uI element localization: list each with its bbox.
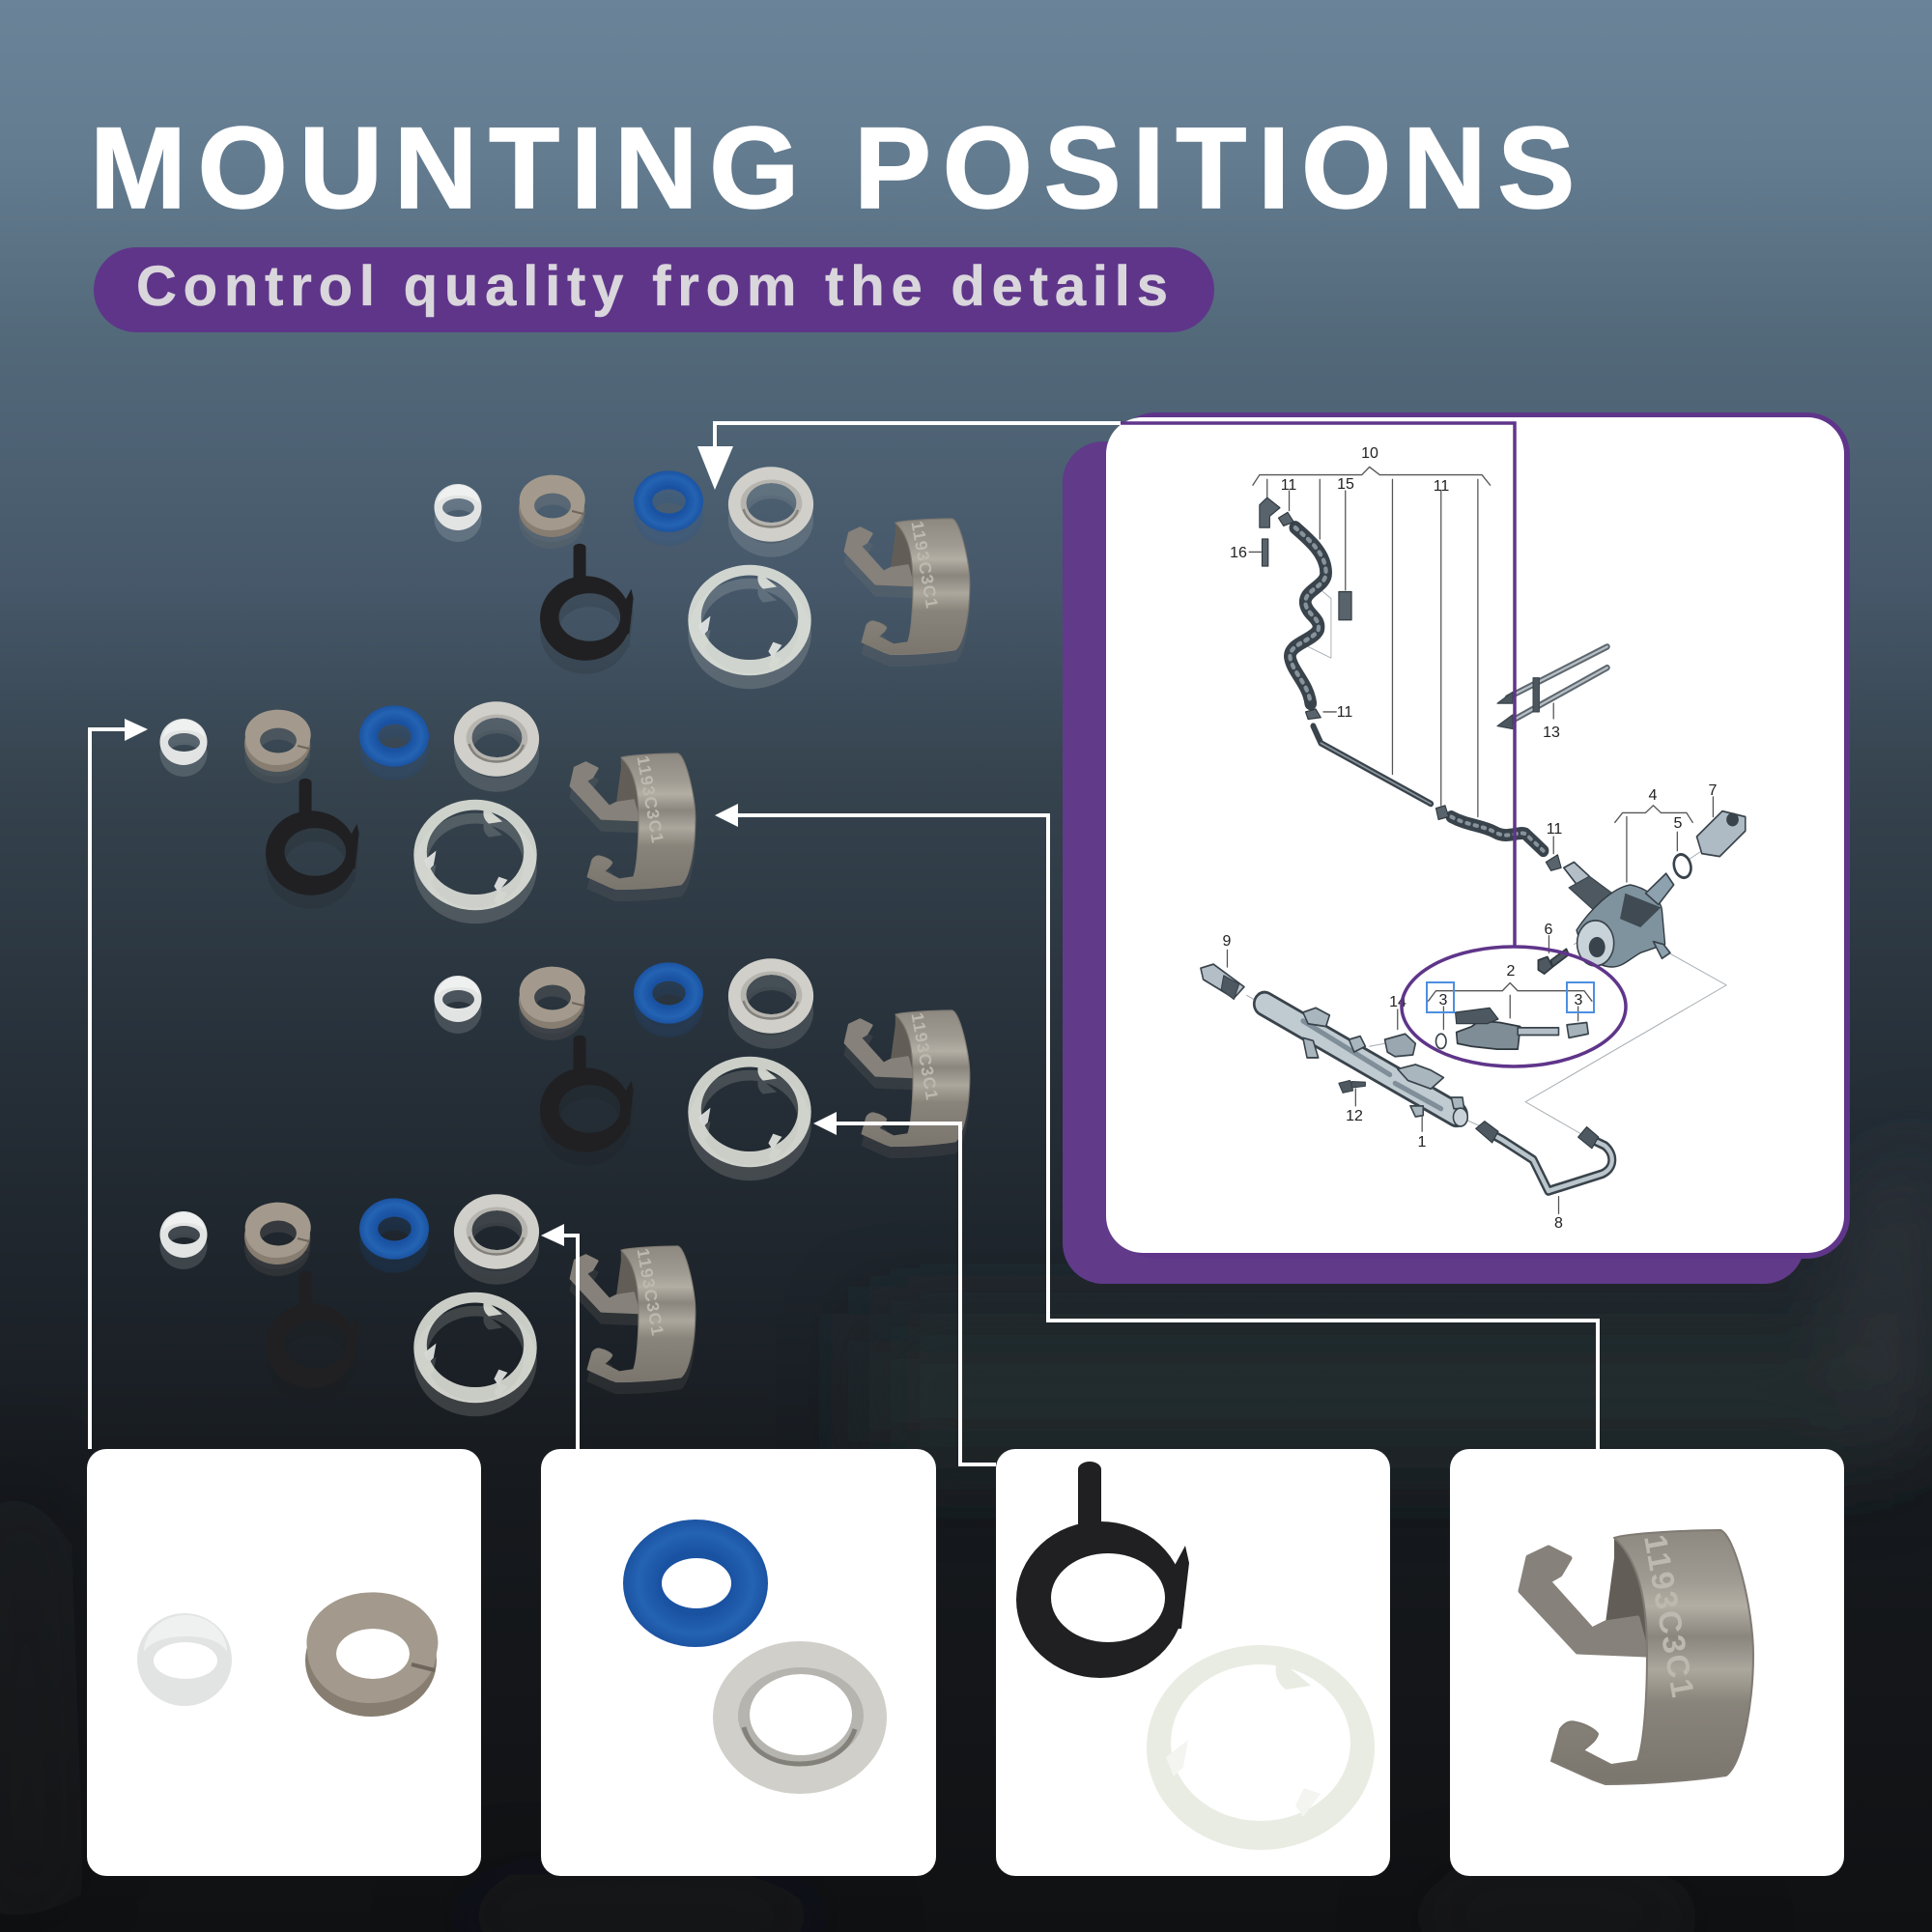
icon: metal washer bbox=[713, 1641, 887, 1794]
highlight: purple ellipse around injector bbox=[1402, 947, 1626, 1066]
part: white bush bbox=[160, 719, 207, 765]
purple connector line bbox=[1121, 423, 1515, 947]
part: white bush bbox=[160, 1211, 207, 1258]
part: tan spacer bbox=[244, 710, 311, 772]
part: black retainer bbox=[540, 1036, 634, 1152]
arrow: panel 2 to set 4 bbox=[541, 1224, 578, 1449]
part number labels: 10 bbox=[1361, 445, 1378, 462]
part: black retainer bbox=[540, 544, 634, 661]
bottom panel: retainer and ring bbox=[996, 1449, 1390, 1876]
arrow: panel 1 to set 2 bbox=[90, 719, 148, 1449]
part number labels: 11 bbox=[1337, 704, 1352, 721]
part: metal clip bbox=[845, 1010, 970, 1147]
part number labels: 15 bbox=[1337, 476, 1354, 493]
part: tan spacer bbox=[244, 1203, 311, 1264]
part: metal washer bbox=[728, 467, 813, 542]
highlight: blue label boxes bbox=[1427, 982, 1594, 1012]
part: black retainer bbox=[266, 1271, 359, 1388]
part number labels: 8 bbox=[1554, 1215, 1563, 1232]
part: white ring bbox=[688, 565, 811, 675]
arrow: panel 3 to set 3 bbox=[813, 1112, 996, 1464]
part: metal washer bbox=[454, 1194, 539, 1269]
title: MOUNTING POSITIONS bbox=[90, 103, 1586, 233]
part: metal washer bbox=[728, 958, 813, 1034]
part number labels: 4 bbox=[1649, 787, 1658, 804]
part number labels: 16 bbox=[1230, 545, 1247, 561]
part number labels: 3 bbox=[1575, 992, 1583, 1009]
exploded parts drawing bbox=[1201, 467, 1746, 1213]
part: white ring bbox=[688, 1057, 811, 1167]
part number labels: 7 bbox=[1709, 782, 1718, 799]
part number labels: 1 bbox=[1418, 1134, 1427, 1151]
icon: white bush bbox=[137, 1613, 232, 1706]
part number labels: 14 bbox=[1389, 994, 1406, 1010]
parts set 2 bbox=[160, 701, 696, 923]
part: white ring bbox=[413, 1293, 537, 1403]
arrow: panel 4 to set 2 clip bbox=[715, 804, 1598, 1449]
part: blue o-ring bbox=[634, 470, 703, 532]
part number labels: 9 bbox=[1223, 933, 1232, 950]
part: black retainer bbox=[266, 779, 359, 895]
bottom panel: metal clip bbox=[1450, 1449, 1844, 1876]
panel white face bbox=[1106, 417, 1844, 1253]
part number labels: 6 bbox=[1545, 922, 1553, 938]
part number labels: 11 bbox=[1434, 478, 1449, 495]
part: white ring bbox=[413, 800, 537, 910]
part number labels bbox=[1223, 445, 1718, 1232]
part: blue o-ring bbox=[634, 962, 703, 1024]
part number labels: 11 bbox=[1547, 821, 1562, 838]
part number labels: 13 bbox=[1543, 724, 1560, 741]
part: metal clip bbox=[571, 1246, 696, 1382]
icon: white ring bbox=[1147, 1645, 1375, 1850]
parts set 1 bbox=[435, 467, 970, 689]
part number labels: 2 bbox=[1507, 963, 1516, 980]
part number labels: 5 bbox=[1674, 815, 1683, 832]
bottom panel: bush and spacer bbox=[87, 1449, 481, 1876]
part: metal clip bbox=[571, 753, 696, 890]
part: metal washer bbox=[454, 701, 539, 777]
parts set 4 bbox=[160, 1194, 696, 1416]
icon: blue o-ring bbox=[623, 1520, 768, 1647]
subtitle text: Control quality from the details bbox=[136, 255, 1175, 318]
bottom panel: o-ring and washer bbox=[541, 1449, 936, 1876]
parts set 3 bbox=[435, 958, 970, 1180]
part: white bush bbox=[435, 976, 481, 1022]
panel outline bbox=[1113, 412, 1850, 1259]
part: white bush bbox=[435, 484, 481, 530]
panel: exploded fuel system diagram bbox=[1063, 412, 1850, 1284]
part number labels: 11 bbox=[1281, 477, 1296, 494]
part: tan spacer bbox=[519, 475, 585, 537]
icon: tan spacer bbox=[305, 1592, 438, 1717]
arrow: diagram to top set bbox=[697, 423, 1121, 490]
part number labels: 3 bbox=[1439, 992, 1448, 1009]
part: metal clip bbox=[845, 519, 970, 655]
subtitle pill bbox=[94, 247, 1214, 332]
part number labels: 12 bbox=[1346, 1108, 1363, 1124]
part: blue o-ring bbox=[359, 705, 429, 767]
part: tan spacer bbox=[519, 967, 585, 1029]
icon: metal clip bbox=[1520, 1530, 1753, 1784]
icon: black retainer bbox=[1016, 1462, 1189, 1678]
part: blue o-ring bbox=[359, 1198, 429, 1260]
panel shadow block bbox=[1063, 441, 1804, 1284]
